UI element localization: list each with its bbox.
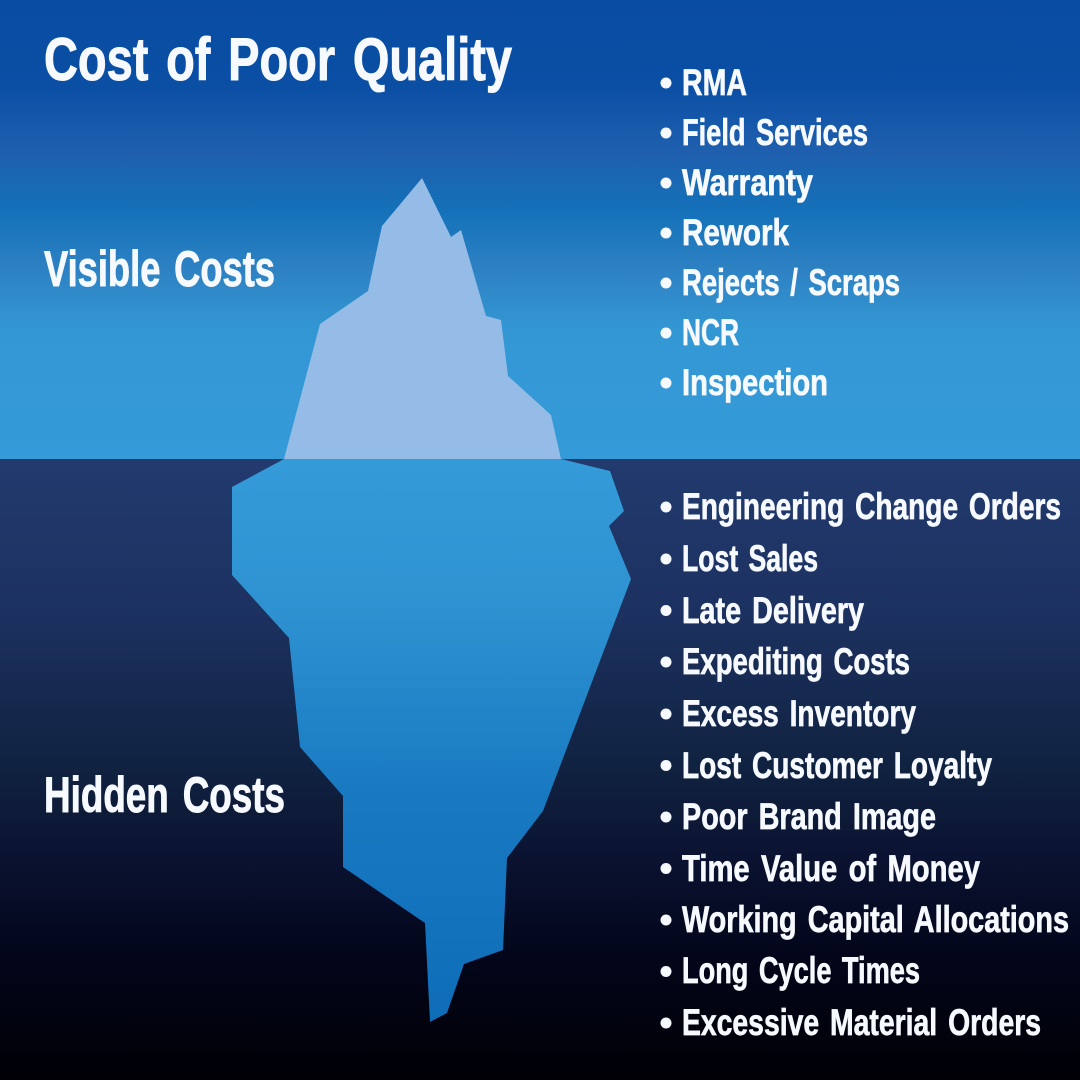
item: Rework: [660, 212, 789, 253]
background: deep water: [0, 459, 1080, 1080]
item: Warranty: Warranty: [682, 162, 813, 203]
item: Field Services: [660, 112, 868, 153]
list: visible costs: [660, 62, 900, 403]
item: Lost Sales: Lost Sales: [682, 538, 818, 579]
item: NCR: [660, 312, 739, 353]
item: Expediting Costs: Expediting Costs: [682, 641, 910, 682]
background: sky above water: [0, 0, 1080, 459]
item: Long Cycle Times: [660, 950, 920, 991]
item: Time Value of Money: Time Value of Money: [682, 848, 980, 889]
item: Poor Brand Image: Poor Brand Image: [682, 796, 936, 837]
item: Rework: Rework: [682, 212, 789, 253]
iceberg: below the waterline: [232, 459, 631, 1022]
item: Expediting Costs: [660, 641, 910, 682]
item: RMA: RMA: [682, 62, 747, 103]
item: NCR: NCR: [682, 312, 739, 353]
item: Rejects / Scraps: Rejects / Scraps: [682, 262, 900, 303]
item: Late Delivery: Late Delivery: [682, 590, 864, 631]
title: Cost of Poor Quality: [44, 26, 512, 93]
item: Lost Customer Loyalty: Lost Customer Loyalty: [682, 745, 992, 786]
item: Excess Inventory: Excess Inventory: [682, 693, 916, 734]
item: Lost Sales: [660, 538, 818, 579]
item: RMA: [660, 62, 747, 103]
item: Rejects / Scraps: [660, 262, 900, 303]
list: hidden costs: [660, 486, 1069, 1043]
heading: hidden costs: Hidden Costs: [44, 767, 285, 823]
heading: visible costs: Visible Costs: [44, 241, 275, 297]
item: Long Cycle Times: Long Cycle Times: [682, 950, 920, 991]
item: Field Services: Field Services: [682, 112, 868, 153]
iceberg: above the waterline: [284, 178, 561, 459]
item: Inspection: Inspection: [682, 362, 828, 403]
